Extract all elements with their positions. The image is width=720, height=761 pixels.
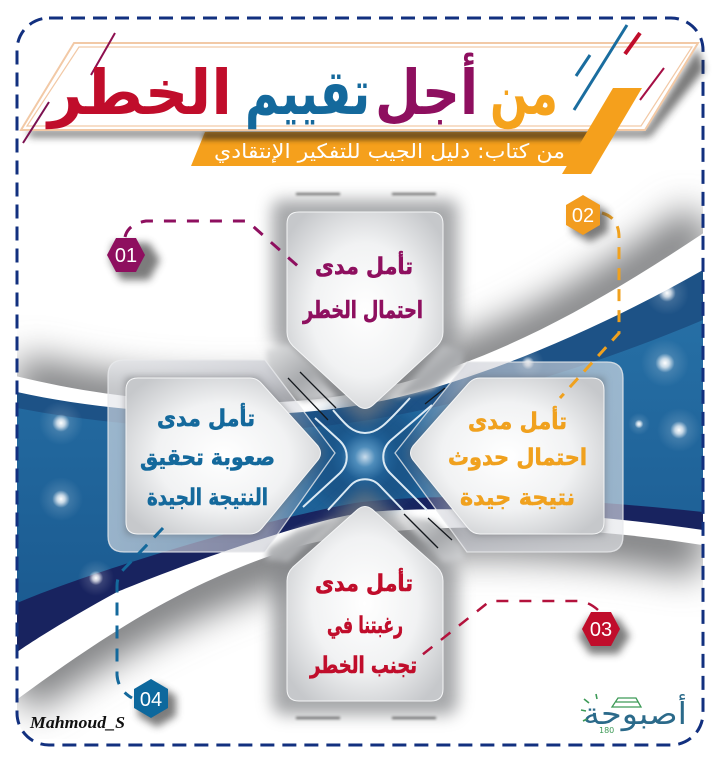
- orange slash: [562, 88, 642, 174]
- frame shadow: top panel: [272, 200, 458, 425]
- badge 02: [566, 195, 608, 242]
- white curved lines: [303, 398, 432, 510]
- title words: أجل: [375, 52, 478, 129]
- connector 04: [117, 528, 163, 698]
- left card text: تأمل مدى: [157, 402, 255, 432]
- subtitle bar: [191, 132, 600, 166]
- frame shadow: right panel: [408, 378, 604, 534]
- frame: left glass panel: [108, 360, 335, 552]
- logo sun rays: [581, 694, 597, 721]
- title words: من: [490, 56, 558, 129]
- title words: الخطر: [45, 56, 232, 129]
- bottom card text: تأمل مدى: [315, 567, 413, 597]
- bottom card text: تجنب الخطر: [309, 653, 417, 679]
- dark blue upper strip: [17, 270, 703, 428]
- bottom card text: رغبتنا في: [327, 613, 403, 639]
- upper grey shading: [17, 225, 703, 406]
- badge 03: [578, 612, 630, 654]
- white swoosh band: [0, 222, 720, 712]
- right card text: نتيجة جيدة: [460, 485, 575, 511]
- title banner: [21, 25, 704, 174]
- right card text: [448, 405, 587, 511]
- centre X glow: [303, 402, 427, 512]
- right card text: تأمل مدى: [468, 405, 567, 435]
- card: top: [287, 212, 443, 408]
- bar shadow: [201, 132, 600, 140]
- badge 04: 04: [140, 689, 162, 711]
- lower grey shading: [17, 528, 703, 690]
- navy strip: [17, 497, 703, 652]
- banner plate: [21, 43, 698, 130]
- top card text: احتمال الخطر: [302, 296, 423, 324]
- connector 02: [560, 213, 619, 398]
- frame shadow: left panel: [126, 378, 323, 534]
- background swoosh: [17, 189, 703, 729]
- signature: Mahmoud_S: [29, 713, 125, 732]
- left card text: صعوبة تحقيق: [140, 445, 275, 471]
- logo book icon: [612, 698, 641, 707]
- left card text: النتيجة الجيدة: [147, 485, 268, 511]
- blue field: [17, 320, 703, 606]
- card: right: [410, 378, 604, 534]
- sparkles: [39, 271, 701, 596]
- badge 01: [107, 238, 160, 280]
- card: left: [126, 378, 320, 534]
- badge 03: 03: [590, 619, 612, 641]
- frame shadow: bottom panel: [272, 488, 458, 715]
- title words: تقييم: [245, 56, 370, 129]
- badge 04: [134, 679, 176, 727]
- frame: right glass panel: [395, 362, 623, 552]
- connector 03: [422, 601, 598, 655]
- top card text: [302, 250, 423, 324]
- badge 01: 01: [115, 245, 137, 267]
- logo number: 180: [599, 726, 614, 735]
- metal corner: top-right: [395, 345, 464, 398]
- logo: أصبوحة: [583, 693, 687, 732]
- subtitle text: من كتاب: دليل الجيب للتفكير الإنتقادي: [214, 139, 565, 164]
- card: bottom: [287, 506, 443, 701]
- top card text: تأمل مدى: [315, 250, 413, 280]
- metal corner: bottom-right: [398, 516, 464, 562]
- metal corner: top-left: [266, 345, 338, 402]
- panel frames: [108, 194, 623, 718]
- right card text: احتمال حدوث: [448, 445, 587, 471]
- black slashes: [288, 372, 452, 548]
- connector 01: [125, 221, 300, 268]
- left card text: [140, 402, 275, 511]
- title words: [45, 52, 558, 129]
- dark edge marks: [296, 194, 436, 718]
- badge 02: 02: [572, 205, 594, 227]
- accent stripes: [23, 25, 664, 143]
- bottom card text: [309, 567, 417, 679]
- metal corner: bottom-left: [266, 520, 335, 562]
- banner shadow: [28, 48, 704, 137]
